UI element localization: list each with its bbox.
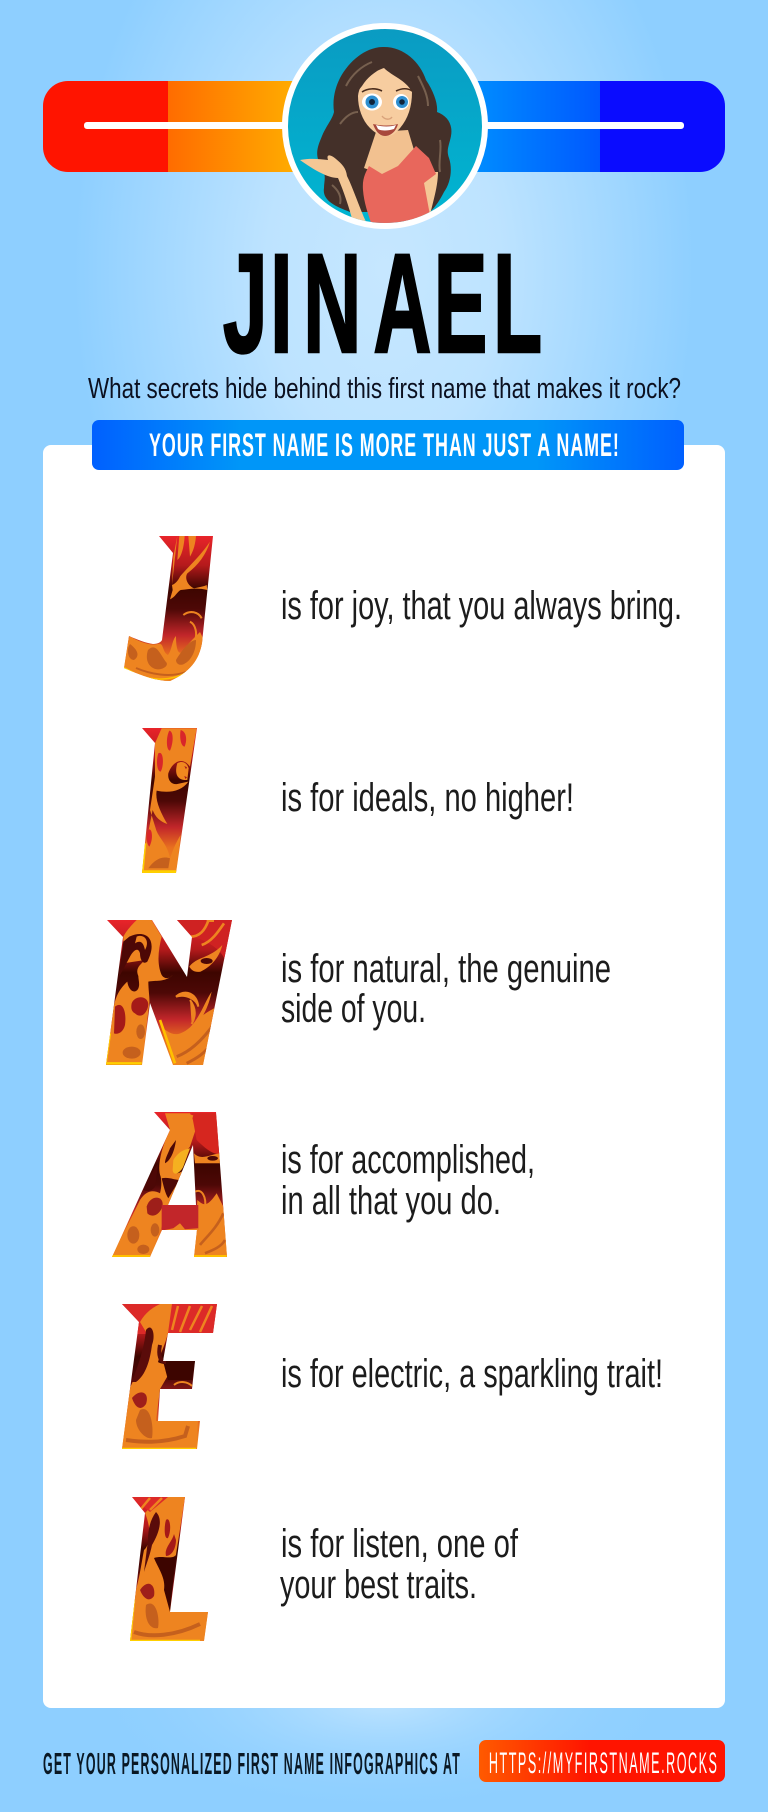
L fire base (128, 1497, 212, 1643)
flame letter I (140, 728, 200, 874)
banner (92, 420, 684, 470)
flame letter L (128, 1497, 212, 1643)
E flames (118, 1304, 198, 1450)
A flames (112, 1113, 227, 1257)
banner background (92, 420, 684, 470)
hair (317, 47, 451, 212)
arm left and hand (300, 155, 368, 226)
ribbon dark blue end (600, 81, 725, 172)
shirt (363, 146, 436, 226)
flame letter A (110, 1112, 230, 1258)
I flames (142, 728, 197, 873)
avatar ring (285, 26, 485, 226)
left eye (362, 94, 382, 110)
button background (479, 1740, 725, 1782)
I fire base (140, 728, 200, 874)
ribbon orange segment (168, 81, 293, 172)
background lower glow (0, 1560, 768, 1812)
white content panel (43, 445, 725, 1708)
row: letter J (120, 536, 682, 684)
row: letter I (140, 728, 574, 874)
J lower flames (124, 632, 204, 684)
row: letter N (104, 920, 611, 1066)
N second line: side of you. (281, 987, 426, 1031)
hair highlights (332, 62, 441, 204)
J fire base (120, 536, 216, 682)
flame letter N (104, 920, 234, 1066)
text for I: is for ideals, no higher! (281, 776, 574, 820)
face (358, 68, 412, 136)
E fire base (120, 1304, 220, 1450)
flame letter E (118, 1304, 220, 1450)
brows (362, 89, 412, 92)
hair fringe (360, 70, 378, 89)
neck and chest (364, 130, 414, 178)
flame letter J (120, 536, 216, 684)
header ribbon (43, 81, 725, 172)
A fire base (110, 1112, 230, 1258)
arm right (410, 172, 438, 220)
button text: HTTPS://MYFIRSTNAME.ROCKS (489, 1746, 717, 1780)
avatar portrait (285, 26, 485, 226)
row: letter L (128, 1497, 519, 1643)
text for A (281, 1138, 535, 1223)
N first line: is for natural, the genuine (281, 947, 611, 991)
L first line: is for listen, one of (281, 1522, 519, 1566)
row: letter A (110, 1112, 535, 1258)
row: letter E (118, 1304, 663, 1450)
banner text: YOUR FIRST NAME IS MORE THAN JUST A NAME! (149, 429, 619, 463)
ribbon red end (43, 81, 168, 172)
nose (382, 116, 392, 119)
A second line: in all that you do. (281, 1179, 501, 1223)
ribbon light blue segment (476, 81, 601, 172)
A first line: is for accomplished, (281, 1138, 535, 1182)
N flames (106, 920, 232, 1065)
footer url button (479, 1740, 725, 1782)
smile (373, 124, 398, 136)
title: JINAEL (223, 225, 542, 383)
right eye (393, 94, 409, 110)
text for L (280, 1522, 519, 1607)
L second line: your best traits. (280, 1563, 477, 1607)
text for N (281, 947, 611, 1031)
illustrated woman (300, 47, 451, 226)
ribbon white line (84, 122, 684, 129)
N fire base (104, 920, 234, 1066)
J upper flames (170, 536, 210, 642)
footer call to action: GET YOUR PERSONALIZED FIRST NAME INFOGRAPHICS AT (43, 1748, 460, 1782)
L flames (128, 1497, 208, 1641)
